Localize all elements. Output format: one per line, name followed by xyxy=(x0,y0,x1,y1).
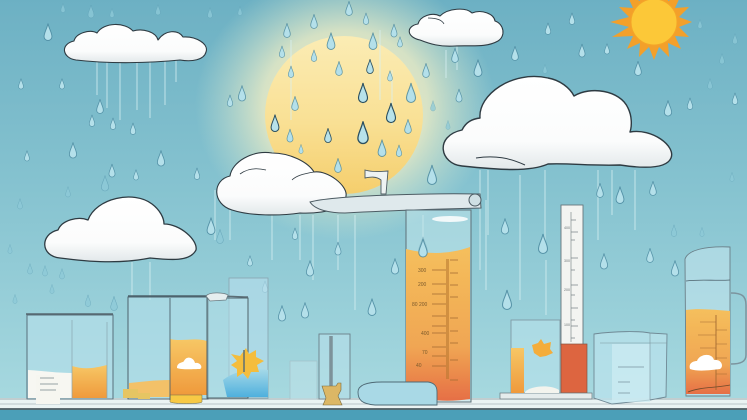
tall cylinder with orange liquid and scale: 400 xyxy=(421,331,430,337)
thermometer with red base: 400 xyxy=(564,226,570,230)
jug with orange liquid and cloud xyxy=(685,247,746,396)
icon: small cloud in beaker xyxy=(177,358,201,369)
measuring cup xyxy=(594,332,667,404)
thermometer with red base: 300 xyxy=(564,259,570,263)
large pale sun xyxy=(265,36,423,194)
cloud: top left xyxy=(64,24,206,63)
tall cylinder with orange liquid and scale: 70 xyxy=(422,350,428,356)
thermometer with red base: 100 xyxy=(564,323,570,327)
tall cylinder with orange liquid and scale: 300 xyxy=(418,268,427,274)
small glasses and tap xyxy=(290,334,350,405)
thermometer with red base: 200 xyxy=(564,288,570,292)
cloud: left xyxy=(45,197,196,262)
beaker with orange strip and sun xyxy=(500,320,592,399)
shelf xyxy=(0,398,747,420)
rain streaks xyxy=(97,30,635,315)
tall cylinder with orange liquid and scale xyxy=(406,210,471,402)
cloud: centre xyxy=(217,153,346,215)
cloud: large right xyxy=(443,76,672,170)
faucet and horizontal pipe xyxy=(310,170,481,213)
beaker B with orange liquid and cloud xyxy=(123,296,208,404)
beaker C with blue water and star sun xyxy=(206,278,268,398)
icon: orange star sun xyxy=(231,348,264,379)
thermometer with red base xyxy=(561,205,587,393)
tall cylinder with orange liquid and scale: 40 xyxy=(416,363,422,369)
raindrops xyxy=(8,1,738,321)
blue pad on shelf xyxy=(358,382,437,405)
small bright sun xyxy=(610,0,692,60)
tall cylinder with orange liquid and scale: 200 xyxy=(418,282,427,288)
tall cylinder with orange liquid and scale: 80 200 xyxy=(412,302,428,308)
icon: small orange sun xyxy=(532,339,553,357)
beaker A with white and orange liquid xyxy=(26,314,113,404)
cloud: top middle xyxy=(409,9,503,46)
sun glow xyxy=(195,0,495,240)
icon: small cloud in jug xyxy=(690,355,722,371)
